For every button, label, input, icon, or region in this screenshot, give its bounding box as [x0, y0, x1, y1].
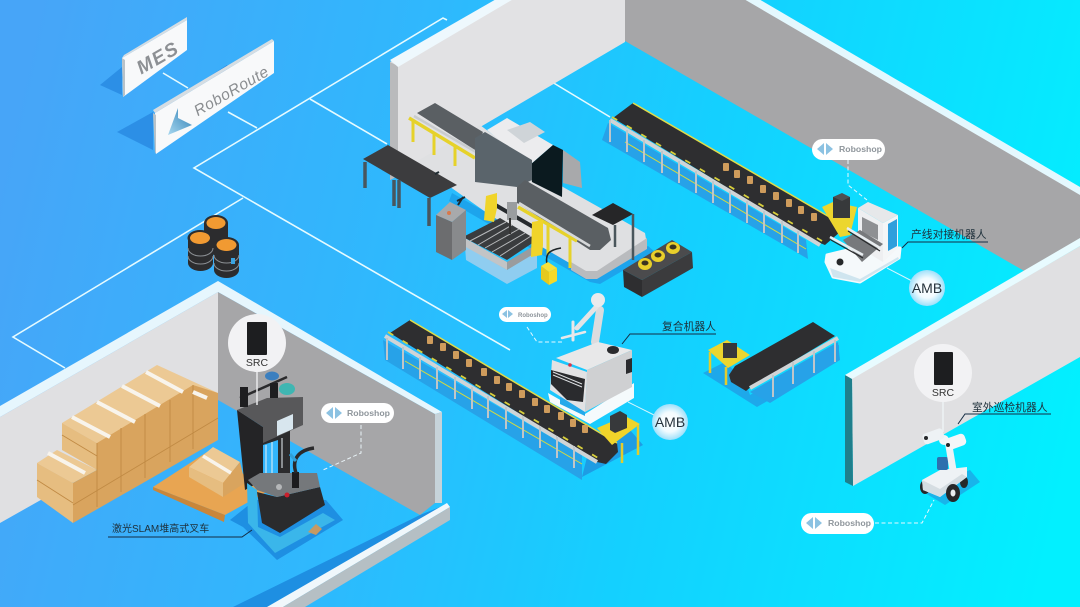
production machine [363, 103, 693, 297]
callout: Roboshop patrol robot: Roboshop [828, 518, 871, 528]
machine housing [475, 118, 582, 197]
bottom-left room [0, 281, 450, 607]
sign: MES [100, 17, 187, 97]
control cabinet [436, 202, 466, 260]
goods on belt [723, 163, 817, 221]
sign: MES: MES [133, 38, 183, 79]
sign: RoboRoute: RoboRoute [191, 63, 272, 120]
lower right wall [845, 238, 1080, 486]
gantry and tray [463, 193, 543, 284]
forklift [230, 372, 343, 560]
barrels [188, 215, 239, 278]
robot body [556, 342, 632, 370]
callout: Roboshop composite robot: Roboshop [518, 313, 548, 319]
callout: Roboshop forklift [321, 403, 394, 470]
conveyor: upper right [602, 103, 840, 259]
parts tray with rings [623, 240, 693, 297]
callout: AMB composite robot [628, 402, 688, 440]
callout: Roboshop docking robot: Roboshop [839, 144, 882, 154]
callout: AMB composite robot: AMB [655, 414, 685, 430]
cardboard boxes [37, 365, 218, 523]
callout: Roboshop forklift: Roboshop [347, 408, 390, 418]
label: forklift [108, 522, 252, 537]
front conveyor [517, 180, 611, 268]
pallet and box [153, 447, 270, 522]
patrol robot [920, 428, 980, 505]
yellow stand with box [708, 340, 750, 385]
yellow stand with box [597, 411, 640, 463]
tiller handle [290, 448, 314, 488]
label: composite robot: 复合机器人 [662, 319, 716, 333]
callout: SRC patrol robot [914, 344, 972, 432]
table [363, 145, 465, 226]
goods on belt [427, 336, 588, 433]
robot arm [562, 293, 605, 342]
conveyor: right [703, 322, 840, 407]
callout: SRC forklift [228, 314, 286, 405]
box tape [48, 372, 207, 473]
mast [237, 372, 303, 490]
callout: Roboshop patrol robot [801, 500, 934, 534]
back wall [390, 0, 1080, 272]
callout: Roboshop docking robot [812, 139, 885, 200]
roller deck [830, 228, 883, 266]
floor pad [230, 500, 343, 560]
label: patrol robot: 室外巡检机器人 [972, 400, 1048, 414]
room walls [0, 281, 442, 523]
label: docking robot: 产线对接机器人 [911, 227, 987, 241]
robot tower [858, 202, 898, 262]
network connection lines [13, 18, 610, 368]
machine base slab [398, 125, 655, 284]
robot base [826, 247, 900, 282]
truck base [247, 483, 335, 553]
small dark table [592, 203, 633, 260]
callout: Roboshop composite robot [499, 307, 562, 342]
conveyor: lower left [383, 320, 643, 480]
callout: AMB docking robot [887, 268, 945, 306]
callout: SRC patrol robot: SRC [932, 387, 955, 399]
composite robot [548, 293, 634, 424]
callout: AMB docking robot: AMB [912, 280, 942, 296]
label: patrol robot [958, 400, 1051, 424]
rear conveyor [409, 103, 483, 166]
docking robot [822, 193, 900, 282]
label: composite robot [622, 319, 716, 344]
yellow stand with box [822, 193, 857, 237]
label: forklift: 激光SLAM堆高式叉车 [112, 522, 209, 535]
logo triangle [168, 108, 192, 135]
callout: SRC forklift: SRC [246, 357, 269, 369]
label: docking robot [902, 227, 988, 248]
room front wall [233, 503, 450, 607]
yellow box [541, 248, 561, 285]
robot white base [548, 383, 634, 424]
sign: RoboRoute [117, 39, 274, 154]
